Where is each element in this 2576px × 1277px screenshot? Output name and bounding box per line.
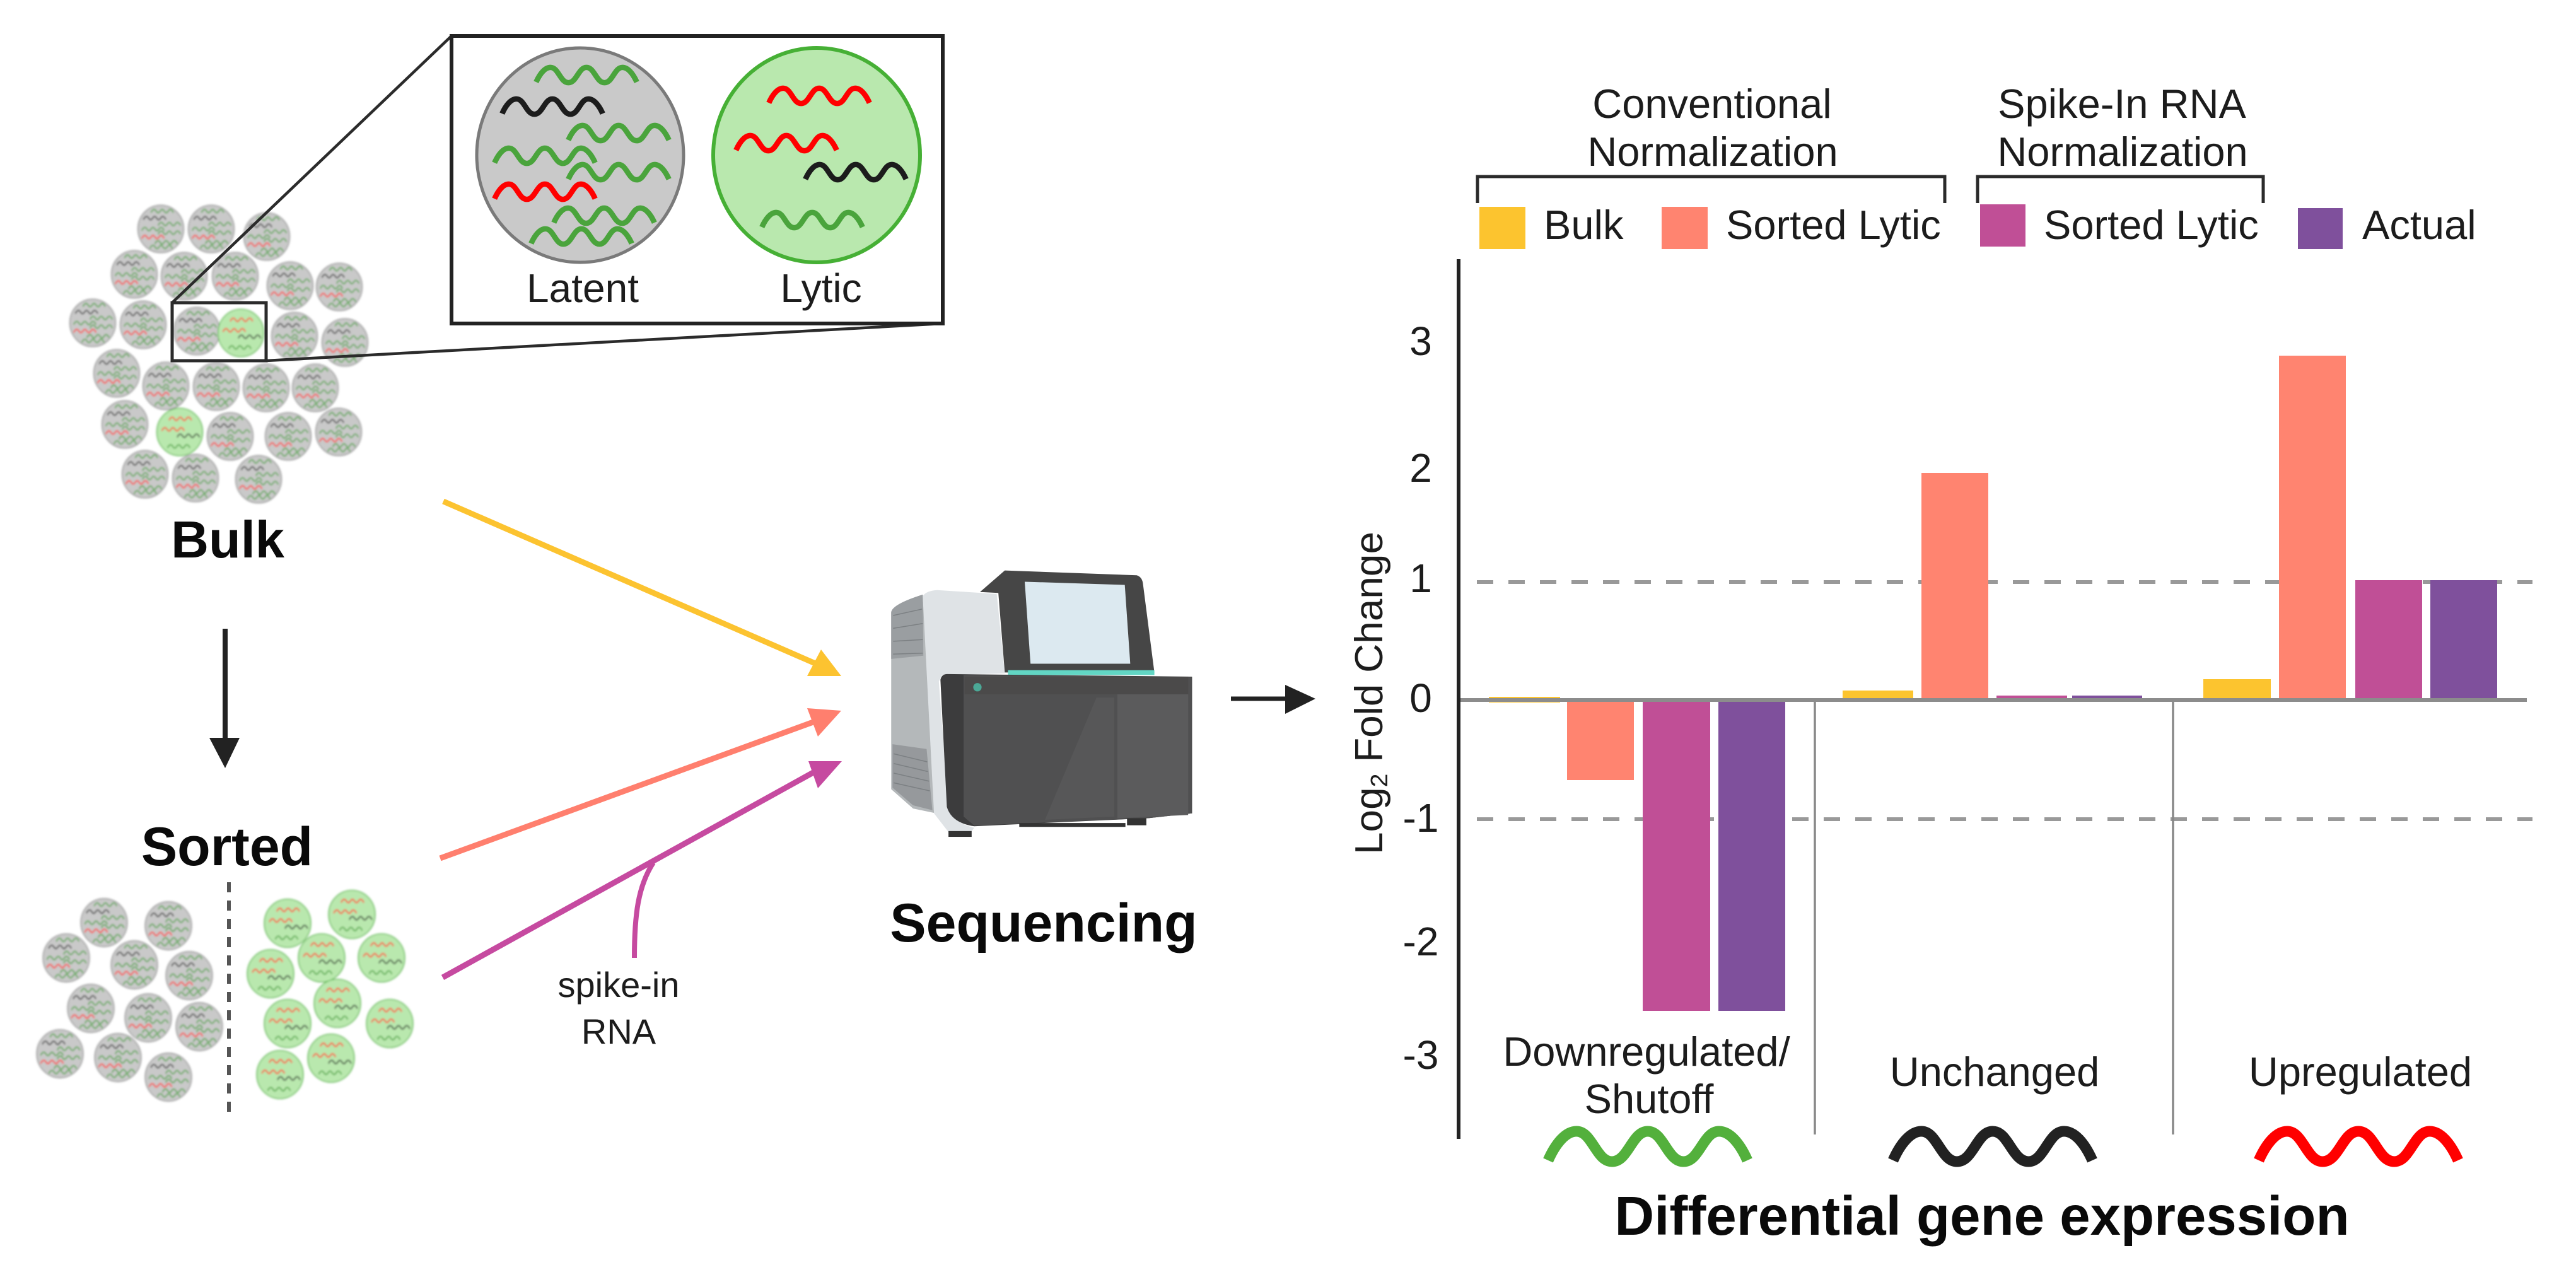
curved spike-in arrow xyxy=(634,863,653,958)
category label: downregulated/shutoff: Downregulated/ xyxy=(1503,1029,1791,1075)
y axis tick labels xyxy=(1403,318,1438,1078)
sorted lytic cells xyxy=(247,890,413,1099)
category label: upregulated: Upregulated xyxy=(2249,1049,2472,1095)
sorted latent cells xyxy=(37,899,223,1101)
zoom selection box with connector lines xyxy=(172,36,943,361)
heading: differential gene expression: Differential gene expression xyxy=(1614,1186,2350,1247)
dashed divider xyxy=(227,882,231,1120)
bracket: conventional xyxy=(1477,177,1945,203)
y axis title: Fold Change xyxy=(1348,532,1391,774)
bars: downregulated xyxy=(1489,697,1785,1011)
arrow: bulk to sequencer (yellow) xyxy=(443,501,841,676)
legend: bulk xyxy=(1479,202,1624,249)
y axis tick labels: 1 xyxy=(1409,556,1432,601)
legend: bulk: Bulk xyxy=(1544,202,1624,248)
label: latent: Latent xyxy=(527,265,639,311)
y axis tick labels: 2 xyxy=(1409,445,1432,491)
y axis tick labels: -3 xyxy=(1403,1032,1438,1078)
bulk cell population xyxy=(70,205,368,503)
icon: black wave xyxy=(1893,1131,2092,1162)
legend: actual xyxy=(2298,202,2476,249)
legend: sorted lytic spike-in: Sorted Lytic xyxy=(2044,202,2259,248)
arrow: spike-in sorted to sequencer (magenta) xyxy=(443,761,842,977)
heading: bulk: Bulk xyxy=(171,510,285,569)
group separators xyxy=(1815,700,2173,1134)
lytic cell xyxy=(713,48,920,262)
arrow: sorted to sequencer (salmon) xyxy=(440,708,841,858)
label: spike-in RNA: spike-in xyxy=(558,965,679,1005)
legend group label: spike-in RNA normalization: Spike-In RNA xyxy=(1998,81,2247,127)
icon: green wave xyxy=(1548,1131,1747,1162)
y axis tick labels: 3 xyxy=(1409,318,1432,364)
legend group label: conventional normalization: Normalization xyxy=(1587,129,1838,175)
legend: actual: Actual xyxy=(2362,202,2476,248)
heading: sequencing: Sequencing xyxy=(890,893,1198,953)
icon: sequencing machine xyxy=(891,571,1192,837)
y axis tick labels: -1 xyxy=(1403,795,1438,841)
arrow: sequencing to chart xyxy=(1231,685,1315,714)
bar chart xyxy=(1348,259,2532,1139)
reference dashed lines xyxy=(1477,582,2532,819)
zero line xyxy=(1459,698,2527,702)
bars: unchanged xyxy=(1843,473,2142,700)
heading: sorted: Sorted xyxy=(141,817,313,877)
arrow: bulk to sorted xyxy=(209,629,240,768)
latent cell xyxy=(477,48,684,262)
y axis title: 2 xyxy=(1367,774,1393,787)
legend: sorted lytic conventional: Sorted Lytic xyxy=(1726,202,1941,248)
legend group label: spike-in RNA normalization: Normalization xyxy=(1997,129,2248,175)
inset panel: latent and lytic cells xyxy=(452,36,943,324)
legend xyxy=(1479,202,2476,249)
category label: unchanged: Unchanged xyxy=(1890,1049,2099,1095)
label: spike-in RNA: RNA xyxy=(581,1012,656,1051)
legend group label: conventional normalization: Conventional xyxy=(1592,81,1832,127)
bracket: spike-in xyxy=(1978,177,2263,203)
category label: downregulated/shutoff: Shutoff xyxy=(1585,1076,1714,1122)
bars: upregulated xyxy=(2203,356,2497,700)
label: lytic: Lytic xyxy=(780,265,862,311)
y axis xyxy=(1457,259,1460,1139)
y axis tick labels: 0 xyxy=(1409,675,1432,721)
y axis tick labels: -2 xyxy=(1403,919,1438,964)
icon: red wave xyxy=(2259,1131,2458,1162)
y axis title: Log xyxy=(1348,790,1391,854)
